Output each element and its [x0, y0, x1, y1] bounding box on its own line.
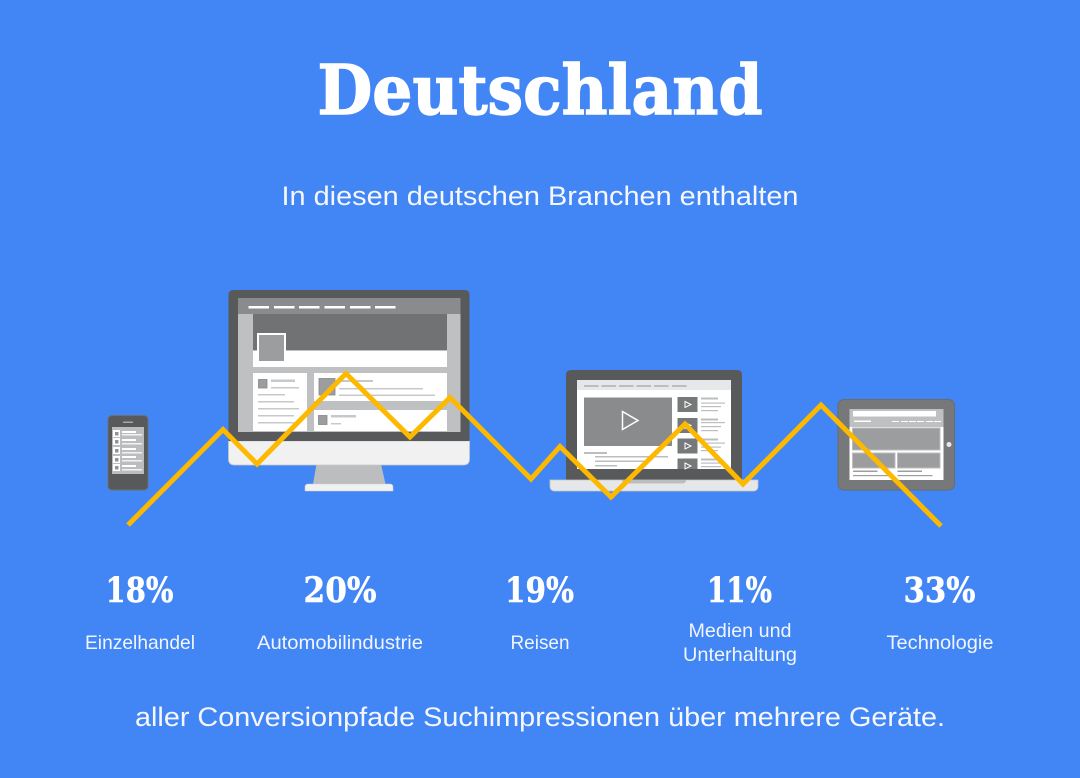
stat: Medien und Unterhaltung: Unterhaltung	[683, 644, 797, 666]
stat: Reisen: Reisen	[510, 632, 570, 654]
stat: Technologie: Technologie	[886, 632, 994, 654]
stat: Medien und Unterhaltung: 11%	[707, 570, 772, 611]
stat: Einzelhandel	[85, 570, 195, 654]
stat: Technologie: 33%	[904, 570, 976, 611]
stat: Medien und Unterhaltung: Medien und	[688, 620, 792, 642]
stat: Reisen: 19%	[505, 570, 574, 611]
stat: Automobilindustrie	[257, 570, 423, 654]
icon: tablet	[838, 400, 954, 490]
title: Deutschland	[318, 51, 762, 131]
icon: smartphone	[108, 416, 148, 490]
stat: Einzelhandel: 18%	[106, 570, 174, 611]
footer text: aller Conversionpfade Suchimpressionen über mehrere Geräte.	[135, 702, 945, 732]
trend line	[128, 374, 941, 526]
stat: Automobilindustrie: 20%	[304, 570, 376, 611]
stat: Automobilindustrie: Automobilindustrie	[257, 632, 423, 654]
icon: desktop monitor	[228, 290, 470, 491]
stat: Technologie	[886, 570, 994, 654]
subtitle: In diesen deutschen Branchen enthalten	[282, 181, 798, 211]
stat: Medien und Unterhaltung	[683, 570, 797, 666]
icon: laptop	[550, 370, 758, 491]
stat: Einzelhandel: Einzelhandel	[85, 632, 195, 654]
stat: Reisen	[505, 570, 574, 654]
